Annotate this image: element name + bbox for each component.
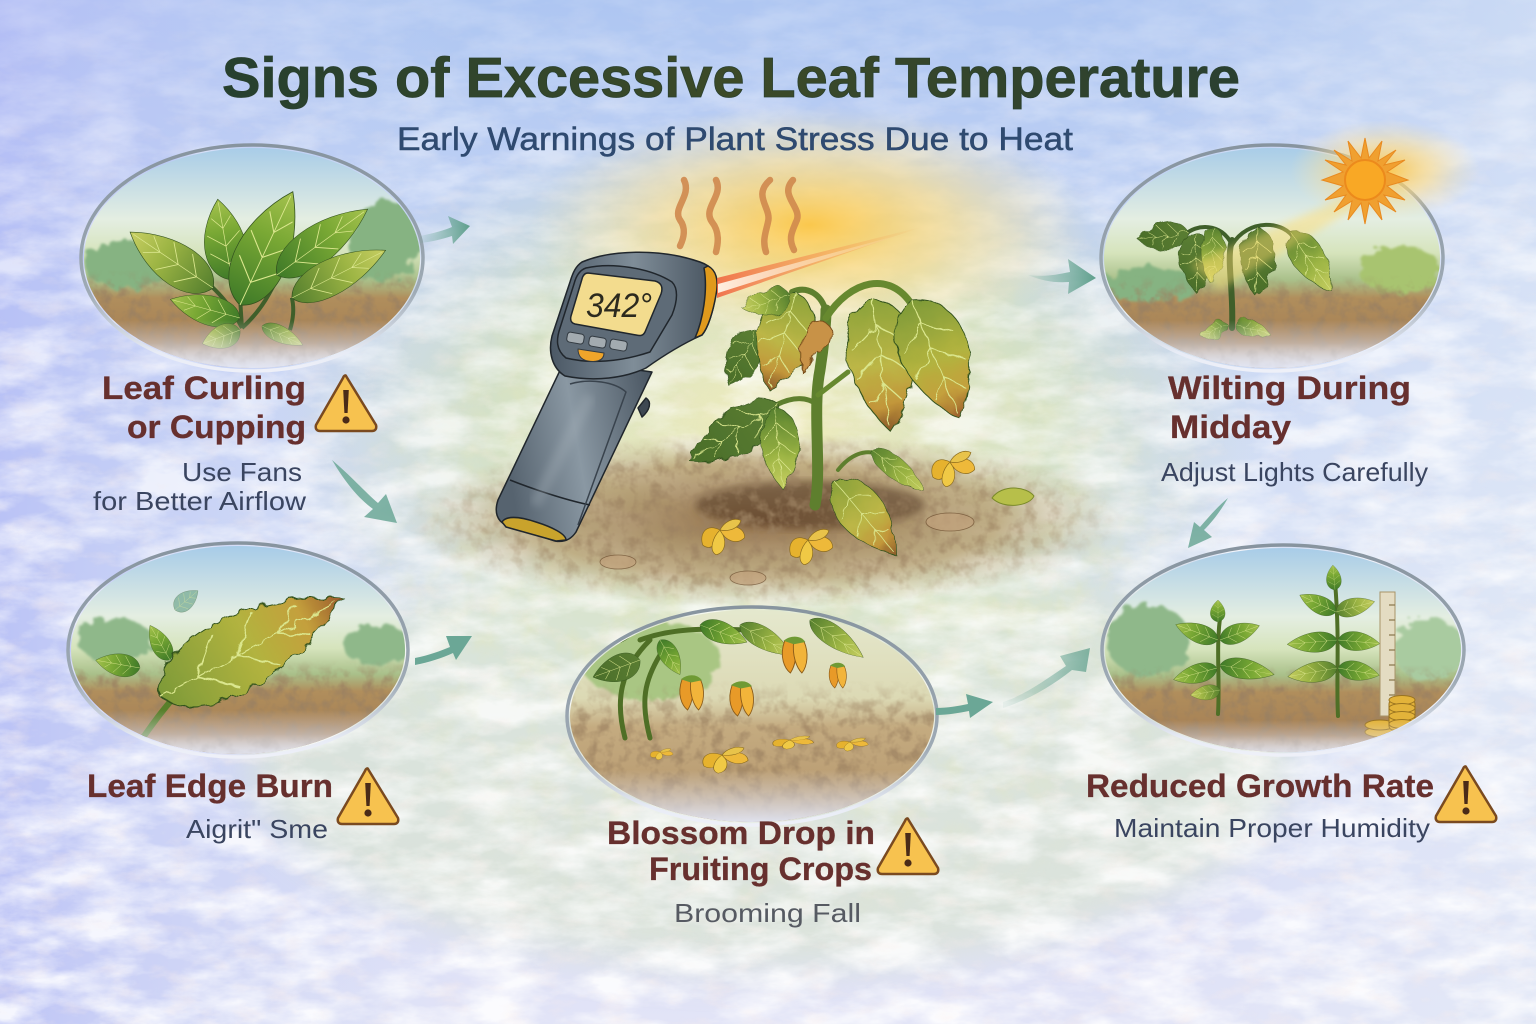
thermometer screen: [571, 273, 662, 336]
vignette ring: [1102, 545, 1464, 755]
fallen blossoms: [702, 451, 1034, 565]
arrow: wilting to growth: [1188, 498, 1228, 548]
icon: warning: [316, 375, 376, 431]
tip: Brooming Fall: [674, 898, 861, 928]
vignette image: blossom drop: [568, 601, 938, 826]
thermometer reading: 342°: [586, 287, 652, 325]
icon: warning: [878, 818, 938, 874]
vignette image: burnt leaf: [68, 545, 414, 760]
vignette ring: [68, 543, 408, 757]
panel: leaf edge burn: [68, 543, 414, 844]
arrow: curling to center: [332, 460, 397, 523]
vignette image: two plants and ruler: [1103, 546, 1466, 761]
arrow: edge burn to center: [415, 636, 472, 665]
panel: wilting during midday: [1100, 120, 1480, 487]
heading: Leaf Curling: [102, 370, 306, 406]
thermometer handle: [496, 360, 652, 541]
arrow: to wilting: [1028, 259, 1096, 294]
tip: Use Fans: [182, 457, 302, 487]
arrow: curling to center top: [420, 216, 470, 244]
title: Signs of Excessive Leaf Temperature: [222, 46, 1240, 110]
vignette image: wilting plant: [1100, 145, 1445, 370]
panel: reduced growth rate: [1086, 545, 1496, 843]
heading: Reduced Growth Rate: [1086, 768, 1434, 804]
vignette image: leaf curling plant: [80, 145, 425, 370]
vignette ring: [567, 607, 937, 825]
tip: Aigrit" Sme: [186, 814, 328, 844]
icon: warning: [338, 768, 398, 824]
heading: [607, 815, 875, 887]
tip: Maintain Proper Humidity: [1114, 813, 1430, 843]
heading: [1168, 370, 1411, 445]
ruler: [1380, 592, 1395, 716]
subtitle: Early Warnings of Plant Stress Due to Heat: [397, 121, 1073, 157]
vignette ring: [1101, 145, 1443, 371]
icon: warning: [1436, 766, 1496, 822]
heading: or Cupping: [127, 409, 306, 445]
wilted leaves: [678, 283, 993, 569]
vignette ring: [81, 145, 423, 371]
panel: blossom drop: [567, 601, 938, 928]
soil stones: [600, 513, 974, 585]
wilted flower bud: [801, 321, 832, 372]
heading: Leaf Edge Burn: [87, 768, 333, 804]
heading: Wilting During: [1168, 370, 1411, 406]
arrow: blossom to growth: [936, 648, 1090, 718]
stems: [776, 283, 912, 505]
tip: Adjust Lights Carefully: [1161, 457, 1428, 487]
coins: [1365, 696, 1415, 737]
heading: Blossom Drop in: [607, 815, 875, 851]
icon: infrared thermometer: [496, 252, 717, 541]
panel: leaf curling: [80, 145, 425, 516]
tip: for Better Airflow: [93, 486, 306, 516]
heading: Midday: [1170, 409, 1291, 445]
icon: sun: [1190, 120, 1480, 290]
central wilted plant: [600, 283, 1034, 585]
tip: [93, 457, 306, 516]
icon: heat waves: [678, 180, 798, 252]
heading: [102, 370, 306, 445]
thermometer buttons: [566, 332, 628, 361]
laser beam: [717, 226, 925, 298]
heading: Fruiting Crops: [649, 851, 872, 887]
thermometer head: [551, 252, 716, 379]
